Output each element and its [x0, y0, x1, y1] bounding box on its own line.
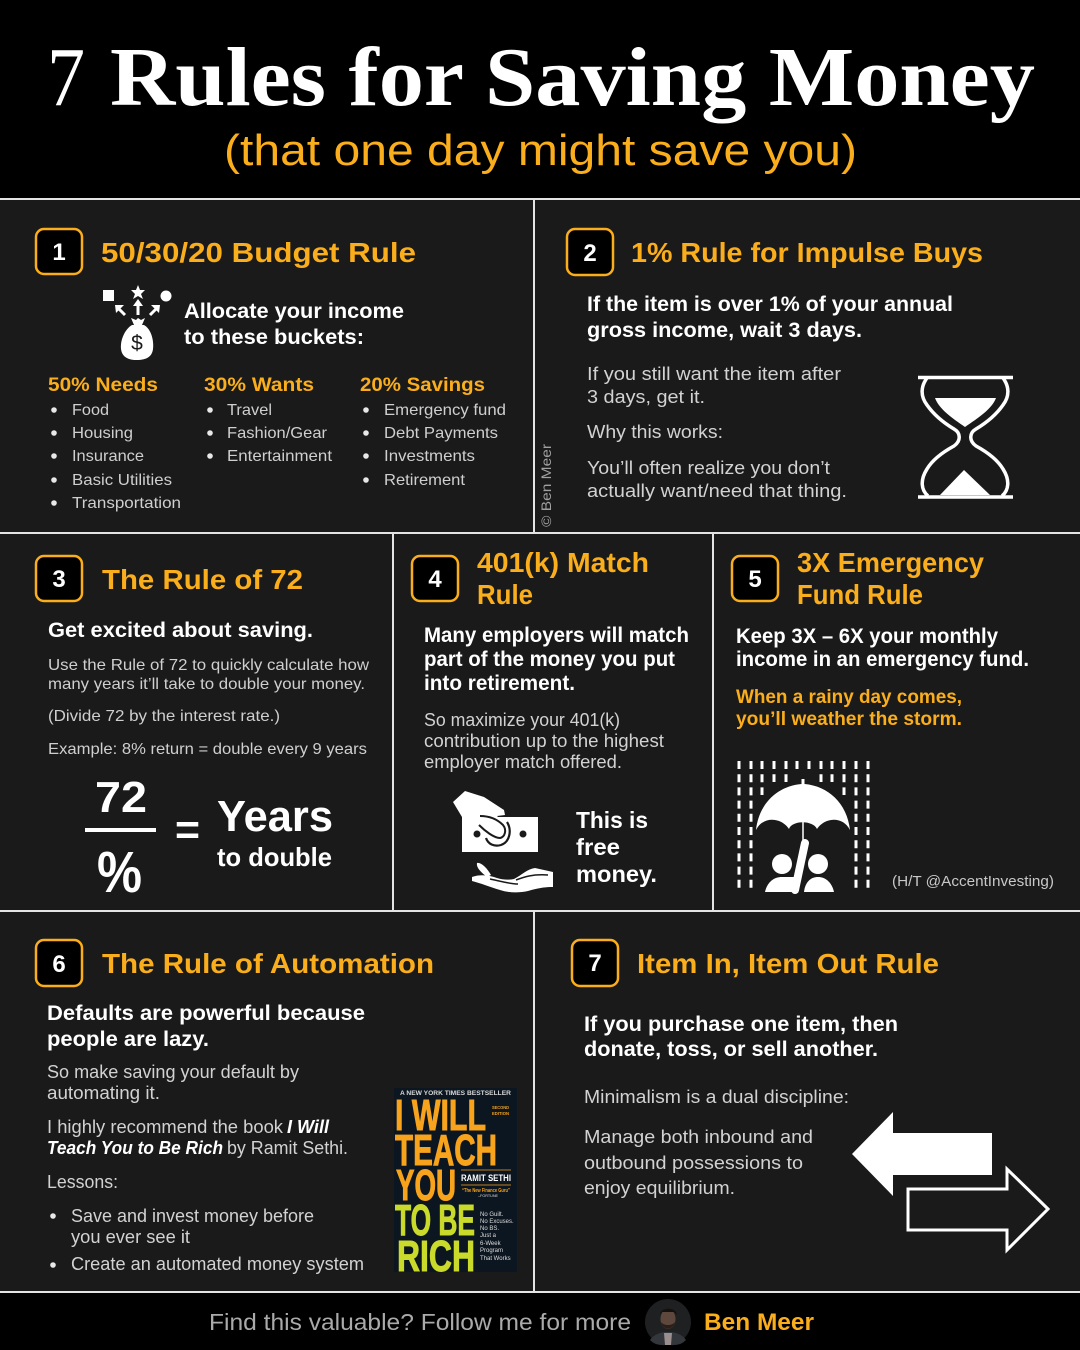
body text rule 2: You’ll often realize you don’t [587, 458, 830, 478]
body text rule 6: I Will [287, 1117, 330, 1137]
heading rule 5 [797, 547, 985, 610]
bucket: needs [48, 374, 181, 512]
lead text rule 2: If the item is over 1% of your annual [587, 293, 953, 316]
icon: hand giving money [453, 791, 553, 892]
icon: money bag with arrows: $ [131, 332, 143, 355]
copyright: © Ben Meer [538, 444, 554, 527]
bucket: needs: Food [72, 402, 109, 419]
body text rule 2: Why this works: [587, 422, 723, 442]
heading rule 5: 3X Emergency [797, 547, 985, 578]
lead text rule 5 [736, 625, 1029, 671]
bucket: needs: Insurance [72, 448, 144, 465]
lead text rule 6: people are lazy. [47, 1028, 209, 1051]
lead text rule 5: Keep 3X – 6X your monthly [736, 625, 998, 648]
lead text rule 2 [587, 293, 953, 342]
lessons list: you ever see it [71, 1227, 190, 1247]
lead text rule 7: donate, toss, or sell another. [584, 1038, 878, 1061]
badge 5 [732, 556, 778, 601]
body text rule 4 [424, 710, 664, 772]
book cover: No BS. [480, 1226, 499, 1232]
callout: free money [576, 807, 657, 887]
book cover: Just a [480, 1233, 497, 1239]
formula: = [175, 806, 200, 853]
body text rule 3 [48, 657, 369, 758]
badge 3: 3 [52, 566, 66, 593]
highlight text rule 5: When a rainy day comes, [736, 686, 962, 708]
icon: money bag with arrows [103, 285, 172, 360]
formula: to double [217, 842, 332, 872]
icon: umbrella in rain [739, 761, 868, 892]
heading rule 5: Fund Rule [797, 579, 923, 610]
lead text rule 7: If you purchase one item, then [584, 1013, 898, 1036]
subtitle: (that one day might save you) [224, 126, 857, 175]
body text rule 3: (Divide 72 by the interest rate.) [48, 708, 280, 725]
bucket: wants [204, 374, 333, 465]
panel: rule 3 rule of 72 [36, 556, 369, 905]
bucket: savings [360, 374, 506, 489]
lessons list: Save and invest money before [71, 1206, 314, 1226]
book cover: I WILL [395, 1091, 486, 1140]
book cover: 6-Week [480, 1241, 502, 1247]
body text rule 4: employer match offered. [424, 752, 622, 772]
callout: free money: This is [576, 807, 648, 833]
lead text rule 4: Many employers will match [424, 624, 689, 647]
body text rule 6: Lessons: [47, 1172, 118, 1192]
body text rule 3: Example: 8% return = double every 9 years [48, 741, 367, 758]
footer band [0, 1293, 1080, 1350]
heading rule 4: Rule [477, 579, 533, 610]
book cover: A NEW YORK TIMES BESTSELLER [400, 1091, 512, 1097]
badge 7 [572, 940, 618, 986]
footer prompt: Find this valuable? Follow me for more [209, 1309, 631, 1335]
formula: % [97, 840, 142, 905]
panel: rule 5 emergency fund [732, 547, 1054, 892]
title: Rules for Saving Money [110, 31, 1035, 124]
credit: (H/T @AccentInvesting) [892, 874, 1054, 890]
body text rule 6: automating it. [47, 1083, 160, 1103]
body text rule 7: outbound possessions to [584, 1153, 803, 1173]
book cover: That Works [480, 1256, 511, 1262]
intro text rule 1: to these buckets: [184, 326, 364, 349]
lead text rule 5: income in an emergency fund. [736, 648, 1029, 671]
badge 2 [567, 229, 613, 275]
panel: rule 1 budget [36, 229, 506, 512]
body text rule 3: Use the Rule of 72 to quickly calculate how [48, 657, 369, 674]
badge 4 [412, 556, 458, 601]
callout: free money: free [576, 834, 620, 860]
body text rule 7 [584, 1087, 849, 1198]
footer name: Ben Meer [704, 1309, 814, 1336]
badge 4: 4 [428, 566, 442, 593]
bucket: savings: Retirement [384, 472, 466, 489]
title: 7 [47, 31, 85, 124]
badge 7: 7 [588, 950, 602, 977]
lead text rule 7 [584, 1013, 898, 1061]
book cover: RAMIT SETHI [461, 1173, 511, 1183]
book cover: SECOND [492, 1105, 510, 1110]
arrow: outbound outline right [908, 1169, 1048, 1250]
heading rule 4 [477, 547, 649, 610]
panel: rule 7 item in item out [572, 940, 1048, 1250]
bucket: needs: Basic Utilities [72, 472, 172, 489]
formula: 72 [95, 773, 147, 822]
bucket: wants: 30% Wants [204, 374, 314, 396]
bucket: savings: 20% Savings [360, 374, 485, 396]
intro text rule 1 [184, 300, 404, 349]
book cover: RICH [397, 1232, 475, 1281]
badge 1: 1 [52, 239, 66, 266]
badge 2: 2 [583, 240, 597, 267]
heading rule 4: 401(k) Match [477, 547, 649, 578]
body text rule 6: Teach You to Be Rich [47, 1138, 223, 1158]
lead text rule 4: part of the money you put [424, 648, 675, 671]
body text rule 4: contribution up to the highest [424, 731, 664, 751]
avatar: Ben Meer portrait [645, 1299, 691, 1345]
body text rule 6: So make saving your default by [47, 1062, 299, 1082]
body text rule 7: enjoy equilibrium. [584, 1178, 735, 1198]
icon: hourglass [918, 378, 1013, 497]
heading rule 6: The Rule of Automation [102, 948, 434, 979]
panel: rule 6 automation [36, 940, 517, 1281]
heading rule 2: 1% Rule for Impulse Buys [631, 237, 983, 268]
intro text rule 1: Allocate your income [184, 300, 404, 323]
bucket: needs: Housing [72, 425, 133, 442]
body text rule 2 [587, 364, 847, 501]
heading rule 1: 50/30/20 Budget Rule [101, 237, 416, 268]
body text rule 6: I highly recommend the book [47, 1117, 284, 1137]
body text rule 6: by Ramit Sethi. [227, 1138, 348, 1158]
badge 6: 6 [52, 951, 66, 978]
bucket: wants: Entertainment [227, 448, 333, 465]
heading rule 7: Item In, Item Out Rule [637, 948, 939, 979]
bucket: needs: Transportation [72, 495, 181, 512]
badge 6 [36, 940, 82, 986]
lead text rule 6 [47, 1002, 365, 1051]
badge 3 [36, 556, 82, 601]
header band [0, 0, 1080, 199]
book cover: “The New Finance Guru” [462, 1188, 510, 1194]
bucket: needs: 50% Needs [48, 374, 158, 396]
book cover: EDITION [492, 1111, 509, 1116]
bucket: wants: Travel [227, 402, 272, 419]
lead text rule 6: Defaults are powerful because [47, 1002, 365, 1025]
bucket: savings: Investments [384, 448, 475, 465]
book cover: No Excuses. [480, 1219, 514, 1225]
badge 1 [36, 229, 82, 274]
lead text rule 2: gross income, wait 3 days. [587, 319, 862, 342]
book cover: Program [480, 1248, 503, 1254]
highlight text rule 5: you’ll weather the storm. [736, 708, 962, 730]
lessons list: Create an automated money system [71, 1254, 364, 1274]
book cover [394, 1088, 517, 1281]
body text rule 2: 3 days, get it. [587, 387, 705, 407]
book cover: TEACH [395, 1126, 497, 1175]
body text rule 6 [47, 1062, 348, 1192]
lessons list [50, 1206, 364, 1274]
callout: free money: money. [576, 861, 657, 887]
book cover: YOU [396, 1161, 456, 1210]
lead text rule 4 [424, 624, 689, 695]
arrow: inbound solid left [852, 1112, 992, 1196]
body text rule 7: Minimalism is a dual discipline: [584, 1087, 849, 1107]
bucket: savings: Debt Payments [384, 425, 498, 442]
badge 5: 5 [748, 566, 762, 593]
bucket: savings: Emergency fund [384, 402, 506, 419]
formula: Years [217, 792, 333, 841]
body text rule 2: If you still want the item after [587, 364, 841, 384]
panel: rule 4 401k [412, 547, 689, 892]
lead text rule 3: Get excited about saving. [48, 619, 313, 642]
book cover: No Guilt. [480, 1212, 504, 1218]
formula [85, 773, 333, 905]
body text rule 3: many years it’ll take to double your money. [48, 676, 365, 693]
body text rule 7: Manage both inbound and [584, 1127, 813, 1147]
body text rule 2: actually want/need that thing. [587, 481, 847, 501]
bucket: wants: Fashion/Gear [227, 425, 328, 442]
body text rule 4: So maximize your 401(k) [424, 710, 620, 730]
book cover: TO BE [395, 1196, 475, 1245]
panel: rule 2 impulse buys [567, 229, 1013, 501]
lead text rule 4: into retirement. [424, 672, 575, 695]
heading rule 3: The Rule of 72 [102, 564, 303, 595]
highlight text rule 5 [736, 686, 962, 730]
book cover: –FORTUNE [478, 1193, 498, 1198]
